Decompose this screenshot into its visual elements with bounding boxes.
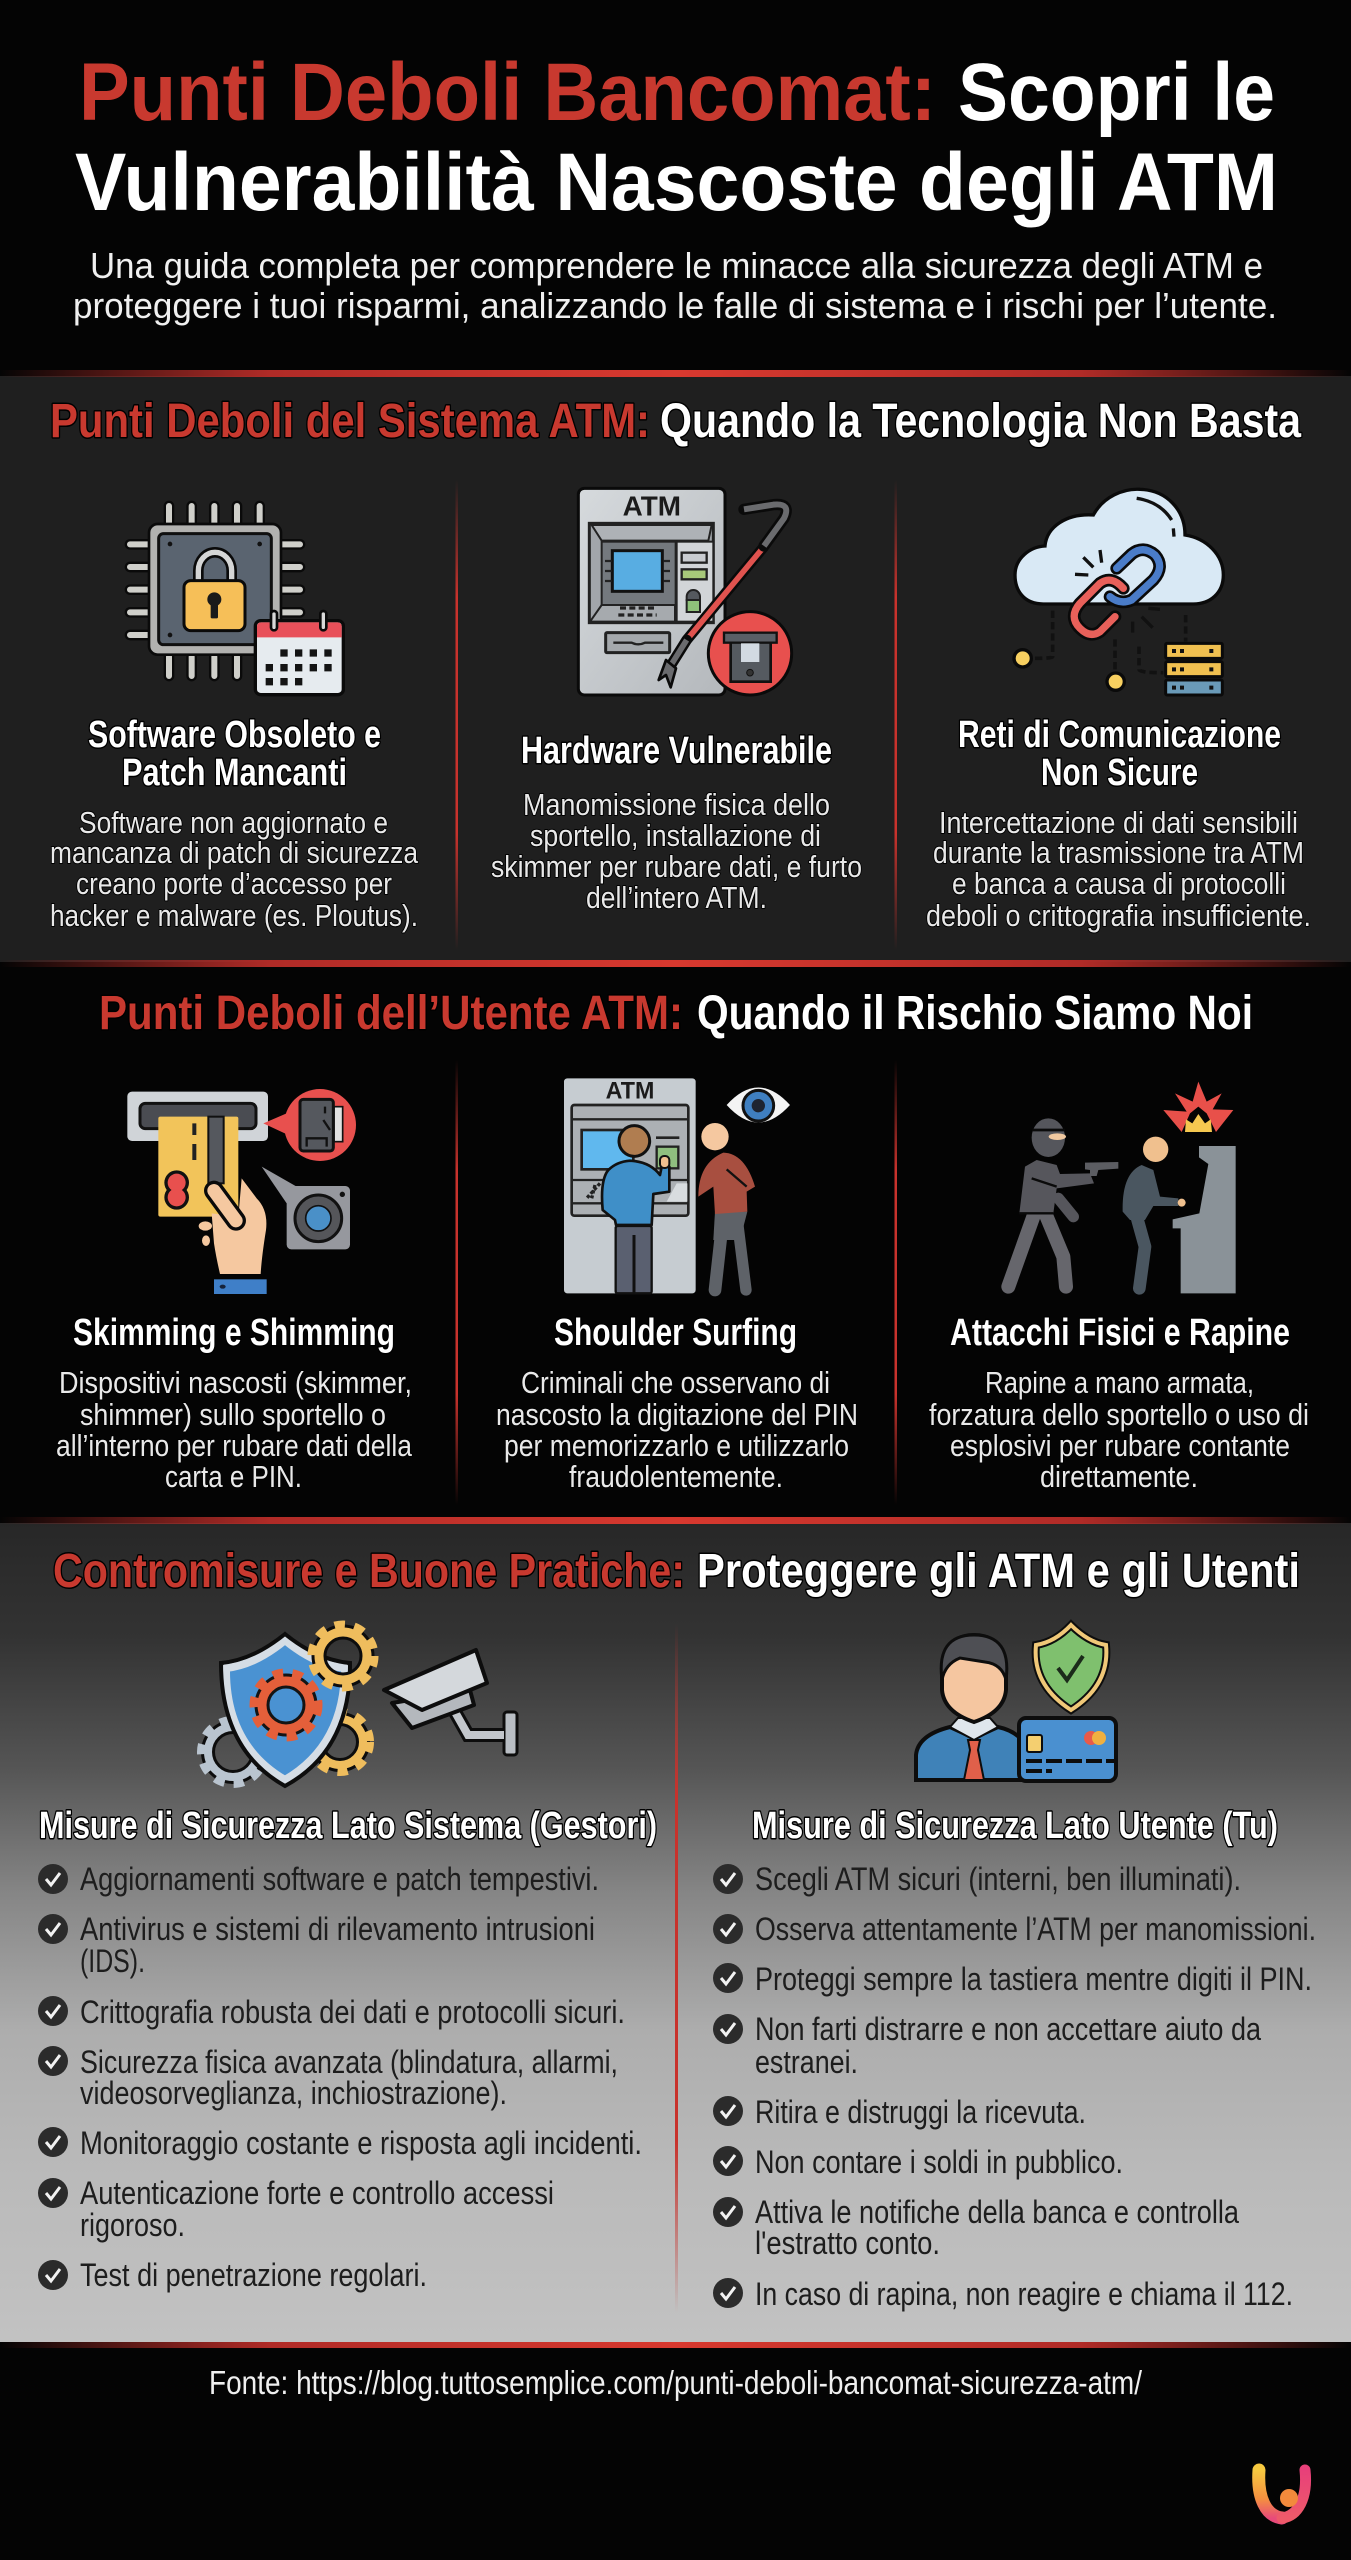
subtitle: [73, 245, 1277, 326]
source line: Fonte: https://blog.tuttosemplice.com/punti-deboli-bancomat-sicurezza-atm/: [209, 2364, 1143, 2401]
checklist: system side: Monitoraggio costante e risposta agli incidenti.: [80, 2125, 642, 2161]
card text: [926, 805, 1311, 933]
checklist: user side: Scegli ATM sicuri (interni, ben illuminati).: [755, 1861, 1241, 1897]
icon: user with shield and bank card: [916, 1625, 1116, 1781]
card text: Intercettazione di dati sensibili: [939, 805, 1298, 840]
card text: [496, 1365, 858, 1494]
section heading: countermeasures: Contromisure e Buone Pratiche:: [53, 1545, 685, 1598]
card text: Manomissione fisica dello: [523, 787, 830, 822]
icon: ATM with crowbar: ATM: [623, 491, 681, 522]
card heading: [958, 714, 1281, 794]
icon: chip with padlock and calendar: [130, 506, 343, 695]
subtitle: Una guida completa per comprendere le minacce alla sicurezza degli ATM e: [90, 245, 1263, 286]
card heading: Hardware Vulnerabile: [521, 730, 832, 772]
checklist: system side: Crittografia robusta dei dati e protocolli sicuri.: [80, 1994, 625, 2030]
checklist: user side: Ritira e distruggi la ricevuta.: [755, 2094, 1086, 2130]
section heading: user: [99, 987, 1253, 1040]
card text: sportello, installazione di: [530, 818, 821, 853]
card text: hacker e malware (es. Ploutus).: [50, 898, 418, 933]
title: Vulnerabilità Nascoste degli ATM: [75, 137, 1278, 228]
title: [75, 47, 1278, 228]
panel: footer: [0, 2342, 1351, 2560]
section heading: system: Punti Deboli del Sistema ATM:: [50, 395, 650, 448]
section heading: user: Punti Deboli dell’Utente ATM:: [99, 987, 683, 1040]
card text: fraudolentemente.: [569, 1459, 783, 1494]
section heading: system: [50, 395, 1301, 448]
checklist: user side: Non contare i soldi in pubblico.: [755, 2144, 1123, 2180]
icon: armed robbery and explosion: [1008, 1082, 1236, 1293]
card text: Criminali che osservano di: [521, 1365, 830, 1400]
checklist: system side: rigoroso.: [80, 2207, 185, 2243]
card text: all’interno per rubare dati della: [56, 1428, 413, 1463]
card heading: Non Sicure: [1041, 752, 1198, 794]
card text: Rapine a mano armata,: [985, 1365, 1254, 1400]
subtitle: proteggere i tuoi risparmi, analizzando le falle di sistema e i rischi per l’utente.: [73, 285, 1277, 326]
checklist: system side: Aggiornamenti software e patch tempestivi.: [80, 1861, 599, 1897]
panel: countermeasures: [0, 1517, 1351, 2342]
checklist: system side: Antivirus e sistemi di rilevamento intrusioni: [80, 1911, 595, 1947]
checklist: system side: [38, 1861, 642, 2293]
card heading: Software Obsoleto e: [88, 714, 381, 756]
checklist: user side: Attiva le notifiche della banca e controlla: [755, 2194, 1239, 2230]
icon: shoulder surfing at ATM: [564, 1077, 790, 1293]
icon: ATM with crowbar: [578, 488, 792, 695]
checklist: user side: [713, 1861, 1316, 2312]
card text: dell’intero ATM.: [586, 880, 767, 915]
card text: e banca a causa di protocolli: [952, 866, 1286, 901]
card text: [491, 787, 862, 915]
section heading: countermeasures: [53, 1545, 1300, 1598]
card text: [929, 1365, 1309, 1494]
card text: [50, 805, 419, 933]
icon: logo: [1259, 2470, 1306, 2518]
card text: nascosto la digitazione del PIN: [496, 1397, 858, 1432]
panel: header: [0, 0, 1351, 376]
card text: shimmer) sullo sportello o: [80, 1397, 386, 1432]
card text: Dispositivi nascosti (skimmer,: [59, 1365, 412, 1400]
checklist: system side: Test di penetrazione regolari.: [80, 2257, 427, 2293]
panel: system weaknesses: [0, 370, 1351, 962]
card text: direttamente.: [1040, 1459, 1198, 1494]
card heading: Shoulder Surfing: [554, 1312, 797, 1354]
icon: cloud with broken chain: [1014, 489, 1223, 695]
checklist: system side: Autenticazione forte e controllo accessi: [80, 2175, 554, 2211]
panel: user weaknesses: [0, 960, 1351, 1523]
icon: shoulder surfing at ATM: ATM: [606, 1077, 654, 1104]
card text: mancanza di patch di sicurezza: [50, 835, 419, 870]
title: Scopri le: [958, 47, 1275, 138]
checklist: system side: (IDS).: [80, 1943, 145, 1979]
card text: [56, 1365, 413, 1494]
title: Punti Deboli Bancomat:: [79, 47, 936, 138]
card heading: [88, 714, 381, 794]
card text: Software non aggiornato e: [79, 805, 388, 840]
subheading: system side: Misure di Sicurezza Lato Sistema (Gestori): [39, 1805, 657, 1847]
icon: shield, gears and CCTV camera: [202, 1626, 517, 1786]
card text: esplosivi per rubare contante: [950, 1428, 1290, 1463]
checklist: system side: videosorveglianza, inchiostrazione).: [80, 2075, 507, 2111]
checklist: user side: estranei.: [755, 2044, 858, 2080]
card text: creano porte d’accesso per: [76, 866, 392, 901]
icon: skimmer on card slot: [127, 1089, 356, 1294]
card text: per memorizzarlo e utilizzarlo: [504, 1428, 849, 1463]
section heading: user: Quando il Rischio Siamo Noi: [697, 987, 1253, 1040]
card text: carta e PIN.: [165, 1459, 302, 1494]
card heading: Patch Mancanti: [122, 752, 347, 794]
checklist: system side: Sicurezza fisica avanzata (blindatura, allarmi,: [80, 2044, 618, 2080]
card text: skimmer per rubare dati, e furto: [491, 849, 862, 884]
checklist: user side: l'estratto conto.: [755, 2225, 940, 2261]
checklist: user side: Non farti distrarre e non accettare aiuto da: [755, 2011, 1261, 2047]
card heading: Skimming e Shimming: [73, 1312, 395, 1354]
